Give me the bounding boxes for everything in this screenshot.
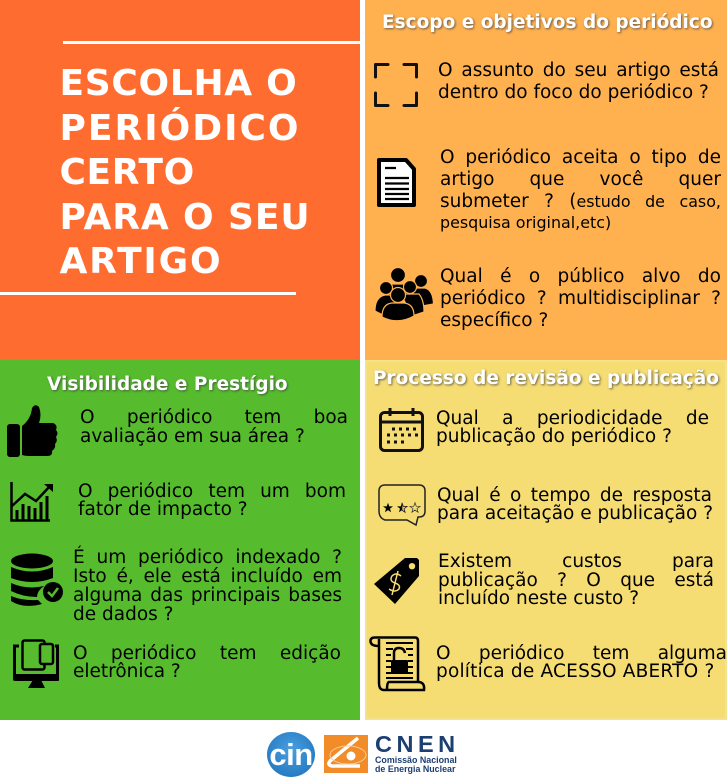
text: frequency question [436, 408, 709, 447]
logos [267, 731, 460, 777]
text: indexing question: de dados ? [73, 604, 174, 625]
icon: document [377, 158, 416, 207]
panel: scope and objectives [365, 0, 727, 360]
icon: group of people [376, 268, 433, 320]
text: article type question [440, 147, 721, 232]
title: CERTO [60, 152, 195, 193]
text: open access question: O periódico tem alguma [436, 643, 727, 664]
text: article type question: submeter ? (estudo de caso, [440, 191, 721, 212]
text: evaluation question: O periódico tem boa [80, 407, 348, 428]
panel: visibility and prestige [0, 360, 360, 720]
logo: cnen wordmark: de Energia Nuclear [375, 764, 455, 774]
text: response time question [437, 485, 713, 524]
text: audience question: específico ? [440, 310, 548, 331]
text: focus question: dentro do foco do periódico ? [438, 82, 709, 103]
text: open access question [436, 643, 727, 682]
icon: rating speech bubble [378, 484, 426, 526]
text: article type question: O periódico aceita o tipo de [440, 147, 721, 168]
logo: cnen wordmark: CNEN [375, 731, 460, 757]
text: costs question [438, 551, 714, 609]
title: PARA O SEU [60, 196, 310, 238]
title: PERIÓDICO [60, 108, 300, 148]
text: audience question: Qual é o público alvo do [440, 266, 721, 287]
text: evaluation question: avaliação em sua área ? [80, 426, 305, 446]
text: focus question: O assunto do seu artigo está [438, 60, 719, 81]
text: focus question [438, 60, 719, 103]
icon: stars [383, 502, 421, 514]
title [60, 63, 310, 282]
text: costs question: publicação ? O que está [438, 570, 714, 590]
title: ARTIGO [60, 241, 222, 282]
text: indexing question: É um periódico indexado ? [73, 547, 342, 568]
text: costs question: Existem custos para [438, 551, 714, 572]
text: evaluation question [80, 407, 348, 446]
text: electronic edition question: O periódico tem edição [73, 643, 341, 664]
text: impact question: fator de impacto ? [78, 499, 248, 520]
icon: database with check [11, 554, 63, 606]
text: indexing question [73, 546, 342, 625]
icon: electronic devices [13, 639, 59, 688]
text: response time question: Qual é o tempo de resposta [437, 485, 712, 506]
text: indexing question: Isto é, ele está incluído em [73, 566, 342, 587]
text: article type question: pesquisa original,etc) [440, 213, 611, 232]
text: article type question: artigo que você quer [440, 169, 721, 190]
text: indexing question: alguma das principais bases [73, 585, 342, 606]
logo: cnen mark [324, 735, 368, 773]
text: impact question [78, 481, 346, 520]
text: electronic edition question [73, 643, 341, 682]
icon: open access scroll [369, 636, 426, 692]
icon: price tag [374, 558, 419, 604]
icon: calendar [379, 408, 424, 452]
panel: review and publication process [365, 360, 727, 720]
text: response time question: para aceitação e publicação ? [437, 503, 713, 524]
logo: cnen wordmark: Comissão Nacional [375, 755, 457, 765]
text: costs question: incluído neste custo ? [438, 588, 639, 609]
text: frequency question: Qual a periodicidade de [436, 408, 709, 429]
text: impact question: O periódico tem um bom [78, 481, 346, 502]
text: audience question [440, 266, 721, 331]
text: audience question: periódico ? multidisciplinar ? [440, 288, 721, 309]
title: ESCOLHA O [60, 63, 297, 104]
heading: visibility: Visibilidade e Prestígio [47, 374, 288, 395]
heading: scope: Escopo e objetivos do periódico [382, 12, 713, 33]
icon: growth chart [10, 482, 53, 522]
text: open access question: política de ACESSO ABERTO ? [436, 661, 715, 682]
icon: thumbs up [7, 405, 58, 457]
heading: process: Processo de revisão e publicação [373, 368, 719, 389]
logo: cnen wordmark [375, 731, 460, 774]
panel: title [0, 0, 360, 360]
logo: cin: cin [269, 737, 313, 772]
text: electronic edition question: eletrônica ? [73, 661, 181, 682]
text: frequency question: publicação do periódico ? [436, 426, 672, 447]
icon: focus frame [374, 63, 418, 107]
